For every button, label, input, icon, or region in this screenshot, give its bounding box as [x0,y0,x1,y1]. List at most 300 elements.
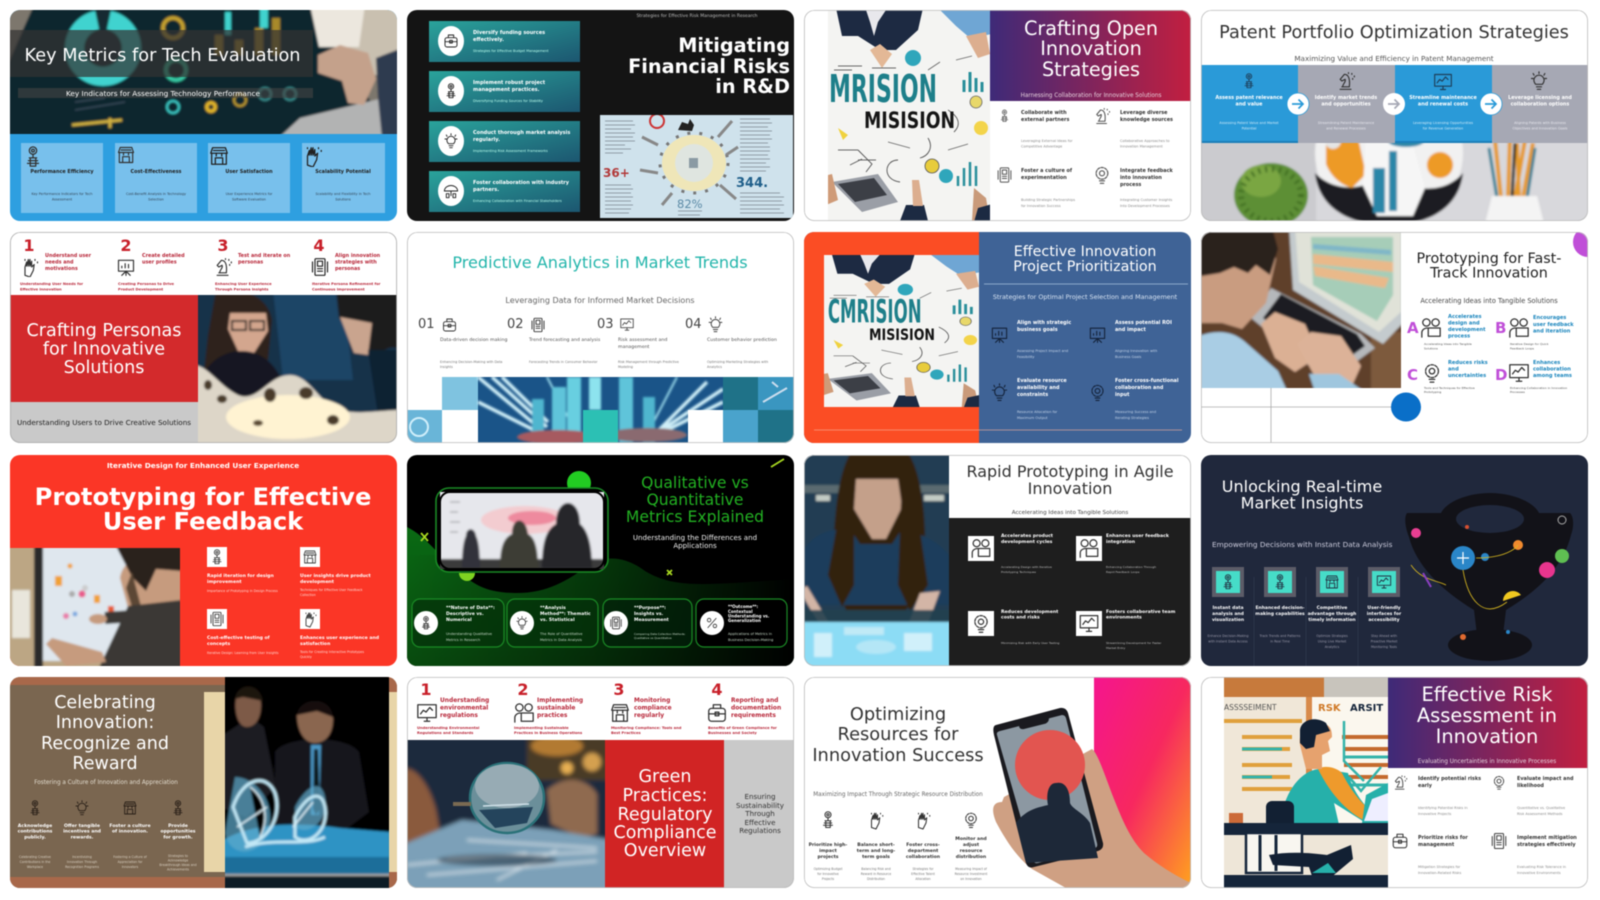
step 3: Conduct thorough market analysis [473,130,570,136]
panel: Outcome: **Outcome**: [728,604,759,609]
band column 2 [1298,65,1395,143]
item: knowledge sources: Leverage diverse [1120,110,1168,116]
step 3: personas [238,260,263,266]
item: visualization: Enhance Decision-Making [1208,634,1248,638]
card: Mitigating Financial Risks in R&D [407,10,794,221]
band column 4: collaboration options [1511,102,1569,108]
item: evaluate impact: Risk Assessment Methods [1517,812,1563,816]
item 02: 02 [507,317,524,332]
item: high-impact: Projects [822,877,834,881]
dividers [1254,577,1358,666]
item: resources: Resource Allocation for [1017,410,1058,414]
item: external partners: external partners [1021,117,1069,123]
item: cost-effective: concepts [207,641,230,647]
item: user insights: Collection [300,593,316,597]
item: visualization: visualization [1212,617,1244,623]
title block [605,740,724,888]
step 3 [611,680,682,735]
subtitle block: Sustainability [736,801,784,810]
photo: man at sticky board [9,547,181,667]
item D: D [1495,366,1507,384]
step 2 [514,680,583,735]
item B: and iteration [1533,328,1571,334]
item: foster culture: Appreciation for [118,860,143,864]
item: monitor: adjust [963,842,980,848]
item: knowledge sources: Collaborative Approaches to [1120,139,1170,143]
subtitle: Applications [673,541,717,550]
step 3: Through Persona Insights [215,288,269,292]
item C: Prototyping [1424,390,1441,394]
step 1: Effective Innovation [20,288,62,292]
item C: C [1407,366,1418,384]
item: knowledge sources [1097,108,1173,148]
step 1: Strategies for Effective Budget Management [473,49,549,53]
item: strategic goals: Assessing Project Impact and [1017,349,1068,353]
step 4: Continuous Improvement [312,288,365,292]
item: rapid iteration: Rapid iteration for design [207,573,274,579]
title: Innovation: [56,713,154,733]
title: Resources for [838,724,959,745]
subtitle: Maximizing Value and Efficiency in Patent Management [1294,54,1494,63]
decorative corner [1573,227,1600,257]
panel: Scalability Potential [302,143,385,213]
item: rapid iteration: Importance of Prototyping in Design Process [207,589,278,593]
step 2: Product Development [118,288,163,292]
step 1: Understanding Environmental [417,726,479,730]
panel: Analysis Method: **Analysis [540,605,566,611]
item: user insights [299,547,372,597]
item: mitigation: Implement mitigation [1517,835,1577,841]
step 1: 1 [23,236,35,255]
subtitle block [724,740,794,888]
header gradient with title [990,10,1191,101]
item: feedback integration: Enhancing Collaboration Through [1106,565,1156,569]
item: identify risks: Innovative Projects [1418,812,1451,816]
panel: Scalability Potential: Scalability Potential [315,169,371,175]
panel: User Satisfaction: User Satisfaction [225,169,273,175]
card: Celebrating Innovation [10,672,397,897]
item: feedback [1096,168,1173,208]
step 3: Best Practices [611,731,641,735]
title: Mitigating [678,34,790,57]
photo: woman at glowing tablet [804,454,950,666]
band column 2: Streamlining Patent Maintenance [1318,121,1374,125]
item: monitor: on Innovation [960,877,982,881]
panel: Cost-Effectiveness: Selection [148,198,164,202]
image mosaic: data burst [406,376,794,444]
item: incentives: Recognition Programs [65,865,99,869]
step 4: requirements [731,713,776,719]
accent lines and circle [1201,388,1421,443]
item: prioritize risks: Mitigation Strategies for [1418,865,1461,869]
step 3 [215,236,291,292]
item: rapid iteration [207,547,278,593]
band column 2: and Renewal Processes [1326,126,1366,130]
panel: Analysis Method: Method**: Thematic [540,611,591,617]
step 3: Enhancing User Experience [215,282,272,286]
item: incentives: Incentivizing [72,855,92,859]
item: user experience [299,609,379,659]
item: growth [159,801,197,872]
item: rapid iteration: improvement [207,579,242,585]
step 2: Implementing Sustainable [514,726,569,730]
item: cross-functional [1092,378,1179,420]
item: high-impact: Prioritize high- [809,842,847,848]
step 2: Implement robust project [473,80,546,86]
step 2: 2 [517,680,529,699]
panel: Performance Efficiency: Assessment [52,198,73,202]
item: accessibility [1367,567,1402,649]
item: balance: Balancing Risk and [861,867,891,871]
title: Recognize and [41,734,169,754]
subtitle: Accelerating Ideas into Tangible Solutions [1012,510,1128,516]
sparkles [421,459,784,575]
illustration: analyst at desk: ASSSSEIMENT [1224,703,1277,712]
item A: Solutions [1424,346,1438,350]
item: identify risks: Identifying Potential Risks in [1418,806,1468,810]
item: feedback integration [1076,533,1170,574]
item: cross-department: Strategies for [912,867,934,871]
title: Rapid Prototyping in Agile [966,462,1174,481]
step 2: practices [537,713,568,719]
subtitle block: Understanding Users to Drive Creative Solutions [17,418,191,427]
step 3: regularly. [473,137,500,143]
arrow 1 [1287,93,1309,115]
panel: User Satisfaction: User Experience Metrics for [226,192,273,196]
item D: Enhances [1533,360,1560,366]
item: growth: Strategies to [168,854,188,858]
step 1 [20,236,92,292]
item: prioritize risks: management [1418,842,1455,848]
item: competitive advantage: Optimize Strategies [1316,634,1348,638]
item: strategic goals: Align with strategic [1017,320,1071,326]
item: feedback: Integrating Customer Insights [1120,198,1172,202]
panel: Analysis Method [507,599,598,647]
step 4 [429,171,580,212]
item 01: Data-driven decision making [440,337,507,343]
item B [1495,315,1574,350]
item: development costs: Minimizing Risk with Early User Testing [1001,641,1060,645]
item: external partners: Leveraging External Ideas for [1021,139,1073,143]
panel: Purpose: Measurement [634,617,670,623]
step 2: 2 [120,236,132,255]
item: decision-making: Track Trends and Patterns [1259,634,1301,638]
item: experimentation: Building Strategic Partnerships [1021,198,1075,202]
step 2 [429,71,580,112]
header gradient with title: Evaluating Uncertainties in Innovative Processes [1418,759,1556,765]
item 01: 01 [418,317,435,332]
band column 3: for Revenue Generation [1423,126,1463,130]
step 2: sustainable [537,706,575,712]
item: ROI [1090,320,1172,359]
item: balance [857,813,895,881]
illustration: data trophy [1405,493,1573,661]
step 1 [429,21,580,62]
subtitle: Strategies for Optimal Project Selection and Management [993,293,1178,301]
step 3: Test and iterate on [238,253,291,259]
card: Patent Portfolio Optimization Strategies [1196,10,1596,228]
title block: Solutions [64,358,144,378]
arrow 2 [1383,93,1405,115]
item: accessibility: Proactive Market [1371,640,1398,644]
card: Qualitative vs Quantitative Metrics Explained [407,455,794,676]
card: Rapid Prototyping in Agile Innovation [799,450,1191,675]
illustration: analyst at desk: ARSIT [1350,703,1383,714]
step 4: 4 [711,680,723,699]
photo: man typing on laptop [1200,232,1402,389]
item: development cycles: Accelerating Design with Iterative [1001,565,1052,569]
item: feedback: Into Development Processes [1120,204,1170,208]
embedded infographic: 36+ [603,166,630,180]
item: strategic goals: Feasibility [1017,355,1034,359]
item: incentives: Innovation Through [67,860,97,864]
item: high-impact: impact [819,848,838,854]
step 3: compliance [634,706,672,712]
step 1: Understanding User Needs for [20,282,83,286]
item: development cycles [968,533,1054,574]
illustration: analyst at desk [1223,677,1389,888]
header gradient with title [1388,677,1588,768]
item: competitive advantage: Using Live Market [1318,640,1347,644]
header gradient with title: Innovation [1040,37,1142,60]
item: development cycles: development cycles [1001,539,1053,545]
item: feedback integration: Rapid Feedback Loops [1106,570,1140,574]
step 3: regularly [634,713,664,719]
step 1 [417,680,489,735]
lime half dot [459,573,475,581]
title: Patent Portfolio Optimization Strategies [1219,23,1569,43]
photo: mission sketch table: MISISION [864,109,955,134]
item C: and [1448,366,1459,372]
card: Crafting Open Innovation Strategies [804,5,1191,226]
item: mitigation: strategies effectively [1517,842,1576,848]
item: ROI: Business Goals [1115,355,1142,359]
item: acknowledge [18,801,53,869]
title: Prototyping for Effective [35,483,371,511]
item: external partners: Competitive Advantage [1021,144,1062,148]
item: decision-making [1255,567,1305,644]
item: ROI: Assess potential ROI [1115,320,1172,326]
step 2: management practices. [473,87,540,93]
item: user experience: Quickly [300,655,312,659]
header gradient with title: Crafting Open [1024,17,1158,40]
title: Reward [72,754,138,774]
step 4 [312,236,381,292]
panel: User Satisfaction [208,143,290,213]
item C [1407,360,1488,394]
item: prioritize risks [1393,834,1468,875]
item: balance: Distribution [867,877,885,881]
item: accessibility: Monitoring Tools [1371,645,1397,649]
item: growth: Breakthrough Ideas and [159,863,197,867]
item: team environments: environments [1106,614,1142,620]
item: strategic goals: business goals [1017,327,1058,333]
embedded infographic [599,114,794,219]
step 1: Understand user [45,253,92,259]
title: Track Innovation [1429,266,1548,282]
step 4: strategies with [335,260,377,266]
item: cross-functional: Iterating Strategies [1115,416,1149,420]
item: team environments: Fosters collaborative team [1106,609,1176,615]
item: feedback: process [1120,182,1141,188]
panel: Nature of Data: Metrics in Research [446,638,480,642]
item: foster culture: Innovators [122,865,139,869]
card: Effective Risk Assessment [1201,677,1588,888]
item: experimentation: for Innovation Success [1021,204,1061,208]
step 1: regulations [440,713,478,719]
item: visualization: with Instant Data Access [1208,640,1248,644]
item: balance: term goals [862,854,890,860]
item: experimentation: experimentation [1021,175,1067,181]
item: acknowledge: Workplace [27,865,43,869]
item 02: Forecasting Trends in Consumer Behavior [529,360,598,364]
item 04: Customer behavior prediction [707,337,777,343]
panel: Performance Efficiency: Performance Efficiency [30,169,94,175]
item: foster culture [109,802,151,869]
item 03: Risk Management through Predictive [618,360,679,364]
illustration: hand holding phone [992,707,1190,888]
title: Quantitative [647,491,743,509]
subtitle block [10,402,198,443]
item 04: 04 [685,317,702,332]
band column 4: Leverage licensing and [1508,95,1572,101]
item: development cycles: Prototyping Techniques [1001,570,1036,574]
item: monitor [955,813,988,881]
photo: mission sketch table [823,254,980,408]
panel: Performance Efficiency [21,143,103,213]
step 4: Iterative Persona Refinement for [312,282,381,286]
panel: Nature of Data: Numerical [446,617,472,623]
item: cost-effective: Cost-effective testing of [207,635,271,641]
item: development costs [968,609,1060,645]
item: cross-functional: input [1115,392,1130,398]
photo: data wall [435,487,610,577]
subtitle band [18,88,313,98]
header gradient with title: Effective Risk [1422,683,1553,706]
item: competitive advantage: Analytics [1325,645,1340,649]
item A: process [1448,334,1470,340]
item 04: Optimizing Marketing Strategies with [707,360,768,364]
item: cross-department [906,813,940,881]
item: knowledge sources: Innovation Management [1120,144,1163,148]
item B: B [1495,319,1506,337]
panel: Scalability Potential: Solutions [335,198,351,202]
item D: among teams [1533,373,1572,379]
item: incentives: incentives and [63,828,101,834]
step 2: Practices in Business Operations [514,731,583,735]
title: User Feedback [103,508,304,536]
item: resources: Evaluate resource [1017,378,1067,384]
item: foster culture: Fostering a Culture of [113,855,148,859]
panel: Performance Efficiency: Key Performance Indicators for Tech [32,192,92,196]
item: foster culture: Foster a culture [109,823,151,829]
item: competitive advantage: Competitive [1317,605,1347,611]
panel: Analysis Method: The Role of Quantitative [539,632,583,636]
item: mitigation [1492,834,1577,875]
item: growth: opportunities [160,828,196,834]
item: development costs: Reduces development [1001,609,1059,615]
panel: Outcome: Business Decision-Making [728,638,773,642]
item: experimentation: Foster a culture of [1021,168,1073,174]
title: Metrics Explained [626,508,764,526]
item: user insights: Techniques for Effective User Feedback [299,588,363,592]
copper bands [10,677,397,888]
item: cost-effective: Iterative Design: Learning from User Insights [207,651,279,655]
item C: Reduces risks [1448,360,1488,366]
item A: design and [1448,321,1480,327]
item A: A [1407,319,1419,337]
panel: Purpose: Qualitative vs Quantitative [634,636,672,640]
item: growth: for growth. [163,834,193,840]
item: development costs: costs and risks [1001,614,1040,620]
title band [10,30,313,77]
item: competitive advantage: timely information [1308,617,1356,623]
step 4: Enhancing Collaboration with Financial Stakeholders [473,199,562,203]
step 4: Align innovation [335,253,381,259]
item 01: Insights [440,365,453,369]
step 4: documentation [731,706,781,712]
panel: Outcome: Generalization [728,618,761,623]
item: mitigation: Innovative Environments [1517,871,1561,875]
step 2: Implementing [537,698,583,704]
item: knowledge sources: knowledge sources [1120,117,1173,123]
header gradient with title: Innovation [1436,725,1538,748]
item: user experience: Tools for Creating Interactive Prototypes [299,650,364,654]
step 1: Regulations and Standards [417,731,474,735]
item: acknowledge: Celebrating Creative [19,855,51,859]
item C: uncertainties [1448,373,1486,379]
card: Prototyping for Effective User Feedback [5,455,397,673]
band column 2: and opportunities [1321,102,1371,108]
step 4 [708,680,781,735]
title: Project Prioritization [1013,259,1157,275]
item: high-impact: Optimizing Budget [814,867,843,871]
green dot [567,471,591,495]
header gradient with title: Harnessing Collaboration for Innovative Solutions [1021,93,1161,99]
item A: development [1448,327,1486,333]
item D [1495,360,1572,394]
item: competitive advantage: advantage through [1308,611,1356,617]
panel: Analysis Method: vs. Statistical [540,617,575,623]
item: growth: Provide [168,823,188,829]
item: experimentation [998,168,1075,208]
step 2: user profiles [142,260,177,266]
item: evaluate impact [1494,776,1574,816]
subtitle block: Through [744,809,775,818]
item: external partners [1001,110,1073,148]
item: balance: Balance short- [857,842,895,848]
band column 1: Assessing Patent Value and Market [1219,121,1279,125]
panel: Outcome [696,599,787,647]
item: cross-functional: Measuring Success and [1115,410,1156,414]
item: team environments: Market Entry [1106,646,1125,650]
item 04: Analytics [707,365,722,369]
step 1: motivations [45,266,78,272]
item: user insights: User insights drive product [300,573,372,579]
panel: Outcome: Understanding vs. [728,614,770,618]
title band: Key Metrics for Tech Evaluation [24,46,301,66]
item: decision-making: Enhanced decision- [1255,605,1305,611]
band column 1: Assess patent relevance [1215,95,1283,101]
item: resources: availability and [1017,385,1060,391]
item: user experience: satisfaction [300,641,330,647]
photo: magnifying glass [406,739,606,888]
panel: Outcome: Contextual [728,609,753,614]
title block: Green [638,767,692,787]
step 1: Diversify funding sources [473,30,545,36]
item B: Encourages [1533,315,1566,321]
step 2 [118,236,185,292]
